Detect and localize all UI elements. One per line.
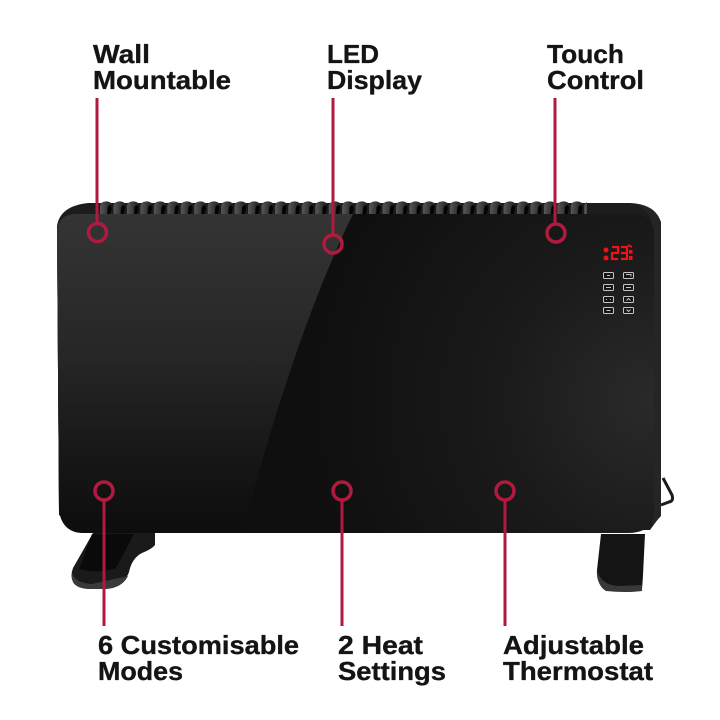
touch control buttons — [604, 272, 634, 314]
foot: right — [597, 534, 645, 592]
callout: touch control — [547, 39, 644, 242]
callout: touch control: Touch — [547, 39, 624, 69]
callout: wall mountable — [88, 39, 231, 242]
callout: touch control: Control — [547, 65, 644, 95]
callout: LED display: Display — [327, 65, 423, 95]
right side frame — [636, 204, 661, 526]
LED display — [604, 245, 632, 260]
foot: left — [72, 533, 155, 589]
callout: 2 heat settings: 2 Heat — [338, 630, 423, 660]
callout: wall mountable: Wall — [93, 39, 150, 69]
callout: adjustable thermostat: Thermostat — [503, 656, 653, 686]
callout: LED display — [324, 39, 423, 253]
callout: wall mountable: Mountable — [93, 65, 231, 95]
glass front panel — [57, 214, 654, 533]
glass reflection — [57, 214, 353, 533]
callout: 2 heat settings: Settings — [338, 656, 446, 686]
heater — [57, 200, 673, 592]
callout: 6 customisable modes: Modes — [98, 656, 183, 686]
callout: adjustable thermostat: Adjustable — [503, 630, 644, 660]
power cord — [661, 478, 673, 505]
top vent ribs — [100, 200, 587, 214]
callout: 6 customisable modes — [95, 482, 299, 686]
callout: LED display: LED — [327, 39, 379, 69]
callout: adjustable thermostat — [496, 482, 653, 686]
callout: 6 customisable modes: 6 Customisable — [98, 630, 299, 660]
callout: 2 heat settings — [333, 482, 446, 686]
rear frame — [57, 203, 661, 530]
